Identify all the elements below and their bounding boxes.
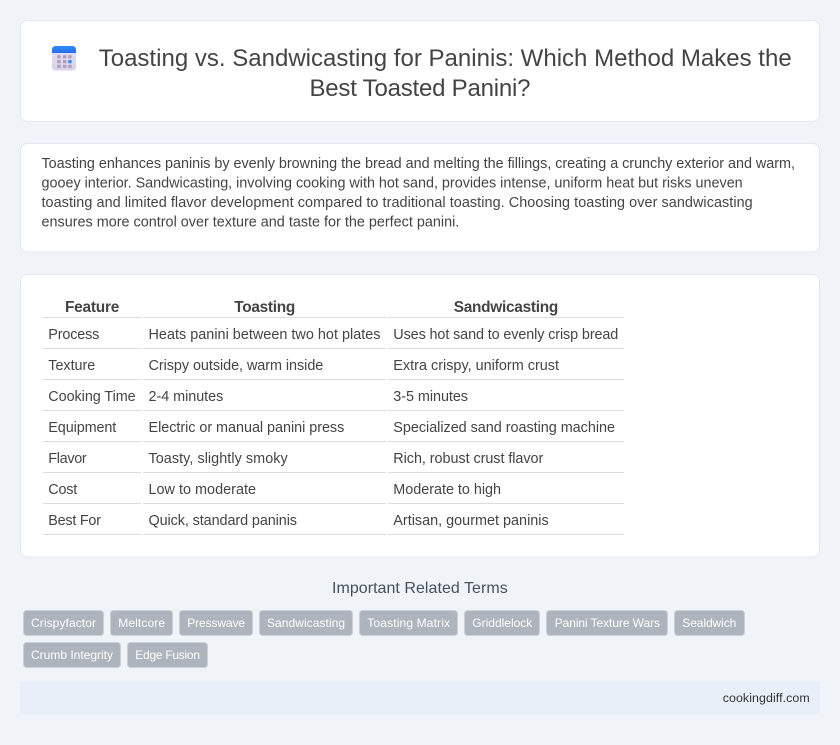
tag: Crumb Integrity: Crumb Integrity	[31, 648, 113, 662]
table row: process: Process	[48, 327, 99, 343]
text block: introduction paragraph: toasting and limited flavor development compared to traditional toasting. Choosing toasting over sandwicasting	[42, 195, 753, 211]
tag: Sealdwich	[674, 610, 744, 636]
table row: cost: Low to moderate	[148, 482, 256, 498]
table row: cost	[43, 482, 624, 504]
title: Toasting vs. Sandwicasting for Paninis: Which Method Makes the	[99, 45, 792, 72]
panel: comparison table	[20, 274, 820, 557]
tag: Crumb Integrity	[24, 642, 120, 668]
tag: Griddlelock	[464, 610, 540, 636]
footer source text: cookingdiff.com	[723, 691, 810, 705]
tag: Sealdwich: Sealdwich	[682, 616, 736, 630]
table header row: Toasting	[234, 299, 295, 316]
title	[99, 45, 792, 102]
table row: flavor: Rich, robust crust flavor	[393, 451, 544, 467]
table row: texture: Texture	[48, 358, 95, 374]
table row: equipment: Specialized sand roasting machine	[393, 420, 615, 436]
table row: equipment: Equipment	[48, 420, 116, 436]
panel: title header	[20, 20, 820, 122]
table row: best for: Quick, standard paninis	[148, 513, 297, 529]
table row: cooking time	[43, 389, 624, 411]
table row: cost: Cost	[48, 482, 77, 498]
tag: Edge Fusion: Edge Fusion	[135, 648, 200, 662]
tag: Meltcore: Meltcore	[118, 616, 165, 630]
tag: Crispyfactor: Crispyfactor	[31, 616, 96, 630]
table row: process	[43, 327, 624, 349]
tag: Toasting Matrix	[360, 610, 458, 636]
table row: flavor: Flavor	[48, 451, 87, 467]
tag: Presswave: Presswave	[187, 616, 245, 630]
text block: introduction paragraph: Toasting enhances paninis by evenly browning the bread and melting the fillings, creating a crunchy exterior and warm,	[42, 156, 795, 172]
table row: texture	[43, 358, 624, 380]
table row: best for: Best For	[48, 513, 101, 529]
tag: Sandwicasting	[260, 610, 352, 636]
table row: cooking time: 3-5 minutes	[393, 389, 468, 405]
tag: Sandwicasting: Sandwicasting	[267, 616, 345, 630]
tag: Meltcore	[110, 610, 172, 636]
table row: equipment: Electric or manual panini press	[148, 420, 344, 436]
icon: calendar	[52, 46, 76, 70]
table row: cost: Moderate to high	[393, 482, 501, 498]
tag: Griddlelock: Griddlelock	[472, 616, 533, 630]
tag: Panini Texture Wars	[546, 610, 668, 636]
text block: introduction paragraph: gooey interior. Sandwicasting, involving cooking with hot sand, provides intense, uniform heat but risks uneven	[42, 176, 743, 192]
table row: best for: Artisan, gourmet paninis	[393, 513, 549, 529]
panel: introduction text	[20, 144, 820, 252]
tag: Crispyfactor	[24, 610, 104, 636]
table row: process: Uses hot sand to evenly crisp bread	[393, 327, 618, 343]
table header row: Sandwicasting	[454, 299, 558, 316]
table row: cooking time: Cooking Time	[48, 389, 136, 405]
title: Best Toasted Panini?	[310, 75, 530, 102]
table row: flavor	[43, 451, 624, 473]
text block: introduction paragraph: ensures more control over texture and taste for the perfect panini.	[42, 214, 459, 230]
footer bar	[20, 681, 820, 714]
table row: flavor: Toasty, slightly smoky	[148, 451, 288, 467]
table row: cooking time: 2-4 minutes	[148, 389, 223, 405]
tag: Edge Fusion	[128, 642, 208, 668]
table header row: Feature	[65, 299, 120, 316]
text block: introduction paragraph	[42, 156, 795, 230]
heading: important related terms: Important Related Terms	[332, 580, 508, 597]
tag list: related terms	[24, 610, 744, 668]
table header row	[43, 299, 624, 318]
tag: Toasting Matrix: Toasting Matrix	[367, 616, 450, 630]
table row: process: Heats panini between two hot plates	[148, 327, 380, 343]
tag: Presswave	[180, 610, 252, 636]
table row: equipment	[43, 420, 624, 442]
table row: texture: Extra crispy, uniform crust	[393, 358, 559, 374]
tag: Panini Texture Wars: Panini Texture Wars	[555, 616, 660, 630]
table row: texture: Crispy outside, warm inside	[148, 358, 323, 374]
table row: best for	[43, 513, 624, 535]
